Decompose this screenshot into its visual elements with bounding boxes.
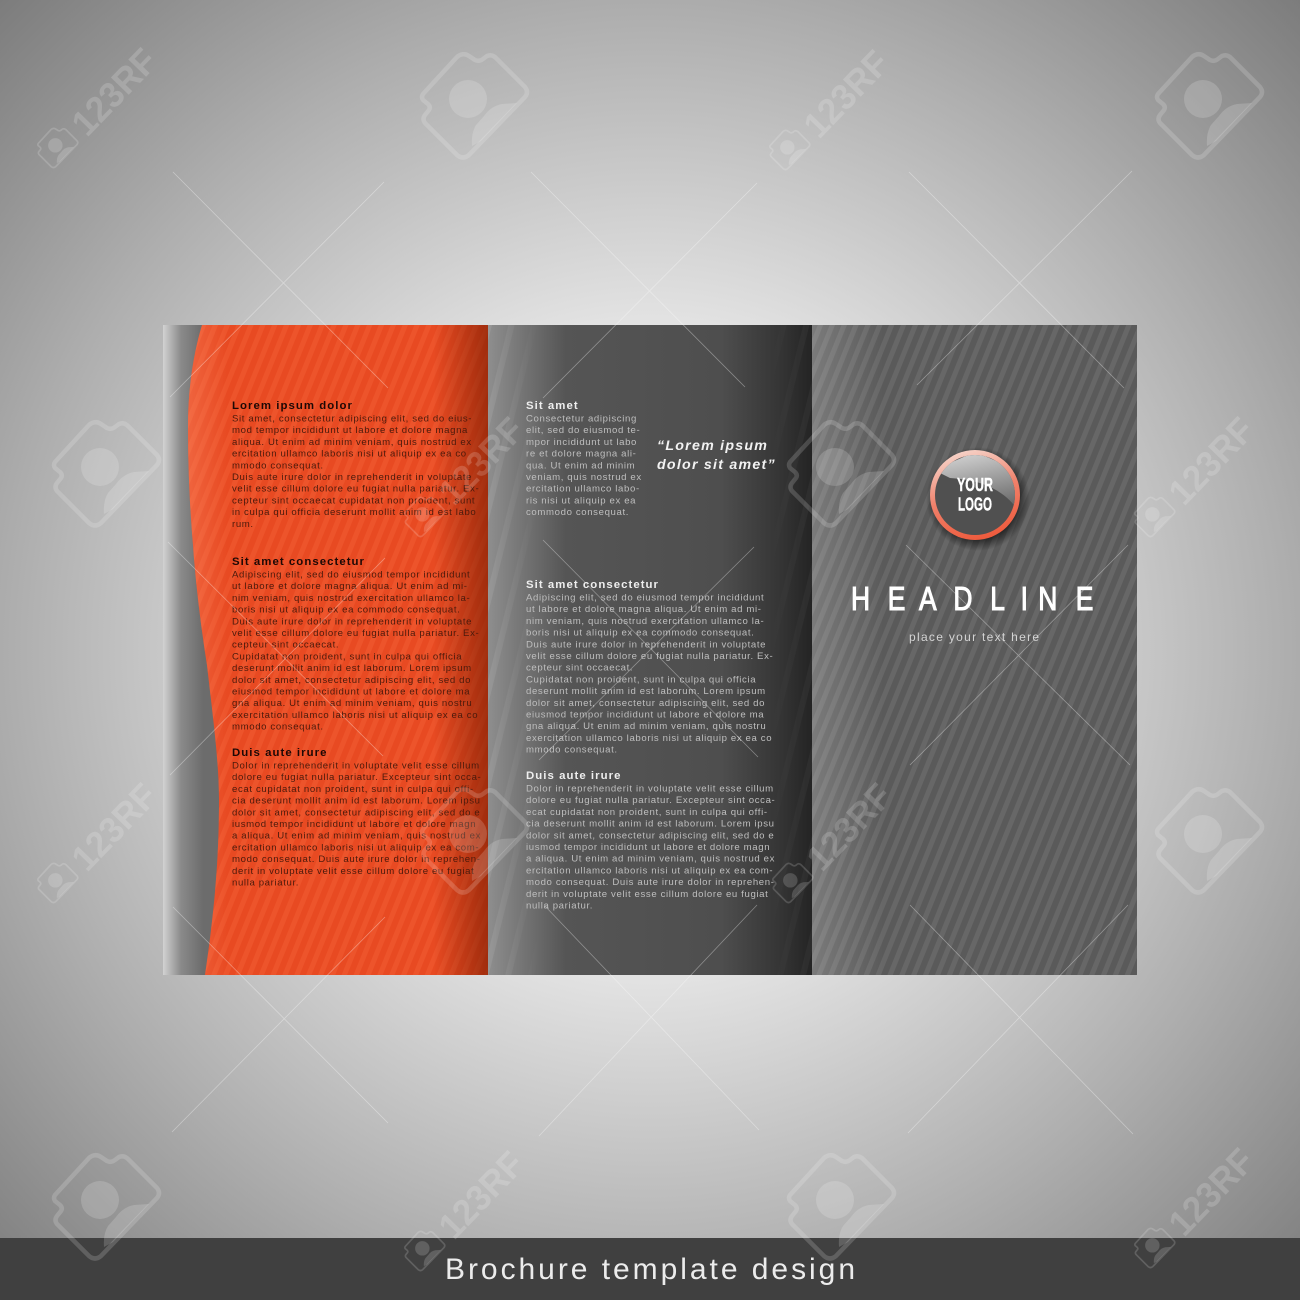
text block: middle body: Duis aute irure dolor in reprehenderit in voluptate — [526, 639, 766, 650]
text block: middle intro: Consectetur adipiscing — [526, 414, 637, 424]
icon: your logo badge: YOUR — [957, 475, 993, 495]
text block: left lower: Dolor in reprehenderit in voluptate velit esse cillum — [232, 760, 480, 772]
text block: left intro: mod tempor incididunt ut labore et dolore magna — [232, 425, 468, 436]
text block: middle body: velit esse cillum dolore eu fugiat nulla pariatur. Ex- — [526, 651, 773, 662]
text block: left lower: dolor sit amet, consectetur adipiscing elit, sed do e — [232, 807, 480, 818]
panel: left orange brochure page — [163, 325, 488, 975]
text block: left intro: aliqua. Ut enim ad minim veniam, quis nostrud ex — [232, 437, 472, 448]
text block: left lower: derit in voluptate velit esse cillum dolore eu fugiat — [232, 866, 474, 877]
subheadline: place your text here — [909, 630, 1040, 644]
pull quote — [657, 438, 776, 473]
text block: middle lower: nulla pariatur. — [526, 900, 593, 912]
text block: left middle: nim veniam, quis nostrud exercitation ullamco la- — [232, 593, 470, 604]
thin crossing lines overlay — [168, 171, 1133, 1136]
pull quote: “Lorem ipsum — [657, 438, 768, 454]
text block: left lower: cia deserunt mollit anim id est laborum. Lorem ipsu — [232, 796, 481, 807]
text block: middle lower: ecat cupidatat non proident, sunt in culpa qui offi- — [526, 807, 768, 818]
headline: HEADLINE — [851, 581, 1093, 618]
text block: middle intro: ris nisi ut aliquip ex ea — [526, 495, 636, 506]
text block: middle lower: a aliqua. Ut enim ad minim veniam, quis nostrud ex — [526, 854, 775, 865]
text block: middle intro: ercitation ullamco labo- — [526, 484, 640, 495]
text block: middle lower: derit in voluptate velit esse cillum dolore eu fugiat — [526, 889, 768, 900]
footer caption: Brochure template design — [445, 1253, 855, 1286]
text block: middle intro: commodo consequat. — [526, 507, 629, 518]
text block: left middle — [232, 570, 479, 733]
text block: middle lower — [526, 784, 775, 912]
text block: left lower: a aliqua. Ut enim ad minim veniam, quis nostrud ex — [232, 831, 481, 842]
footer band — [0, 1238, 1300, 1300]
text block: middle intro: veniam, quis nostrud ex — [526, 472, 642, 483]
text block: middle body: ut labore et dolore magna aliqua. Ut enim ad mi- — [526, 604, 762, 615]
text block: middle body — [526, 592, 773, 756]
text block: middle body: Cupidatat non proident, sunt in culpa qui officia — [526, 674, 756, 685]
text block: left intro: mmodo consequat. — [232, 460, 324, 471]
heading: Duis aute irure: Duis aute irure — [526, 770, 622, 782]
text block: left middle: cepteur sint occaecat. — [232, 640, 339, 651]
text block: middle intro: re et dolore magna ali- — [526, 449, 636, 460]
text block: middle body: Adipiscing elit, sed do eiusmod tempor incididunt — [526, 592, 764, 604]
text block: left lower: modo consequat. Duis aute irure dolor in reprehen- — [232, 854, 481, 865]
text block: middle lower: iusmod tempor incididunt ut labore et dolore magn — [526, 842, 770, 853]
text block: middle lower: Dolor in reprehenderit in voluptate velit esse cillum — [526, 784, 774, 794]
text block: left intro: Sit amet, consectetur adipiscing elit, sed do eius- — [232, 414, 472, 424]
text block: middle lower: dolor sit amet, consectetur adipiscing elit, sed do e — [526, 830, 774, 841]
heading: Duis aute irure: Duis aute irure — [232, 747, 328, 759]
heading: Sit amet consectetur: Sit amet consectetur — [232, 556, 365, 568]
text block: middle body: mmodo consequat. — [526, 745, 618, 756]
text block: left lower: iusmod tempor incididunt ut labore et dolore magn — [232, 819, 476, 830]
text block: middle body: exercitation ullamco laboris nisi ut aliquip ex ea co — [526, 733, 772, 744]
text block: left lower: dolore eu fugiat nulla pariatur. Excepteur sint occa- — [232, 772, 481, 783]
text block: left middle: mmodo consequat. — [232, 722, 324, 733]
text block: middle body: boris nisi ut aliquip ex ea commodo consequat. — [526, 628, 754, 639]
text block: middle lower: modo consequat. Duis aute irure dolor in reprehen- — [526, 877, 775, 888]
text block: left intro: ercitation ullamco laboris nisi ut aliquip ex ea co — [232, 449, 467, 460]
text block: left middle: eiusmod tempor incididunt ut labore et dolore ma — [232, 686, 470, 698]
text block: middle body: deserunt mollit anim id est laborum. Lorem ipsum — [526, 686, 766, 697]
text block: left middle: velit esse cillum dolore eu fugiat nulla pariatur. Ex- — [232, 628, 479, 639]
text block: left middle: Cupidatat non proident, sunt in culpa qui officia — [232, 651, 462, 662]
text block: left lower — [232, 760, 481, 888]
text block: middle intro: qua. Ut enim ad minim — [526, 460, 635, 471]
text block: left intro — [232, 414, 479, 530]
heading: Sit amet consectetur: Sit amet consectetur — [526, 579, 659, 591]
text block: left intro: Duis aute irure dolor in reprehenderit in voluptate — [232, 472, 472, 483]
icon: your logo badge — [926, 447, 1030, 551]
icon: your logo badge: LOGO — [958, 494, 992, 514]
text block: left intro: in culpa qui officia deserunt mollit anim id est labo — [232, 507, 476, 518]
text block: middle intro: mpor incididunt ut labo — [526, 437, 637, 448]
text block: left middle: boris nisi ut aliquip ex ea commodo consequat. — [232, 605, 460, 616]
text block: middle body: gna aliqua. Ut enim ad minim veniam, quis nostru — [526, 721, 766, 732]
text block: left intro: cepteur sint occaecat cupidatat non proident, sunt — [232, 495, 475, 506]
pull quote: dolor sit amet” — [657, 457, 776, 473]
panel: right cover page — [812, 325, 1137, 975]
text block: left lower: ercitation ullamco laboris nisi ut aliquip ex ea com- — [232, 842, 479, 853]
text block: middle lower: ercitation ullamco laboris nisi ut aliquip ex ea com- — [526, 865, 773, 876]
text block: left middle: deserunt mollit anim id est laborum. Lorem ipsum — [232, 663, 472, 674]
text block: middle body: dolor sit amet, consectetur adipiscing elit, sed do — [526, 698, 765, 709]
text block: left middle: Duis aute irure dolor in reprehenderit in voluptate — [232, 616, 472, 627]
panel: middle dark brochure page — [488, 325, 812, 975]
text block: left middle: dolor sit amet, consectetur adipiscing elit, sed do — [232, 675, 471, 686]
text block: middle body: eiusmod tempor incididunt ut labore et dolore ma — [526, 710, 764, 720]
text block: left intro: velit esse cillum dolore eu fugiat nulla pariatur. Ex- — [232, 484, 479, 495]
text block: left middle: gna aliqua. Ut enim ad minim veniam, quis nostru — [232, 698, 472, 709]
text block: middle lower: dolore eu fugiat nulla pariatur. Excepteur sint occa- — [526, 795, 775, 806]
text block: left lower: nulla pariatur. — [232, 878, 299, 888]
text block: left middle: ut labore et dolore magna aliqua. Ut enim ad mi- — [232, 581, 468, 592]
heading: Sit amet: Sit amet — [526, 400, 579, 412]
text block: left lower: ecat cupidatat non proident, sunt in culpa qui offi- — [232, 784, 474, 795]
text block: middle lower: cia deserunt mollit anim id est laborum. Lorem ipsu — [526, 819, 775, 830]
text block: middle body: nim veniam, quis nostrud exercitation ullamco la- — [526, 616, 764, 627]
text block: middle body: cepteur sint occaecat. — [526, 663, 633, 674]
heading: Lorem ipsum dolor: Lorem ipsum dolor — [232, 400, 353, 412]
text block: left intro: rum. — [232, 519, 254, 530]
text block: left middle: exercitation ullamco laboris nisi ut aliquip ex ea co — [232, 710, 478, 721]
text block: middle intro: elit, sed do eiusmod te- — [526, 425, 640, 436]
text block: middle intro — [526, 414, 642, 518]
text block: left middle: Adipiscing elit, sed do eiusmod tempor incididunt — [232, 570, 470, 580]
